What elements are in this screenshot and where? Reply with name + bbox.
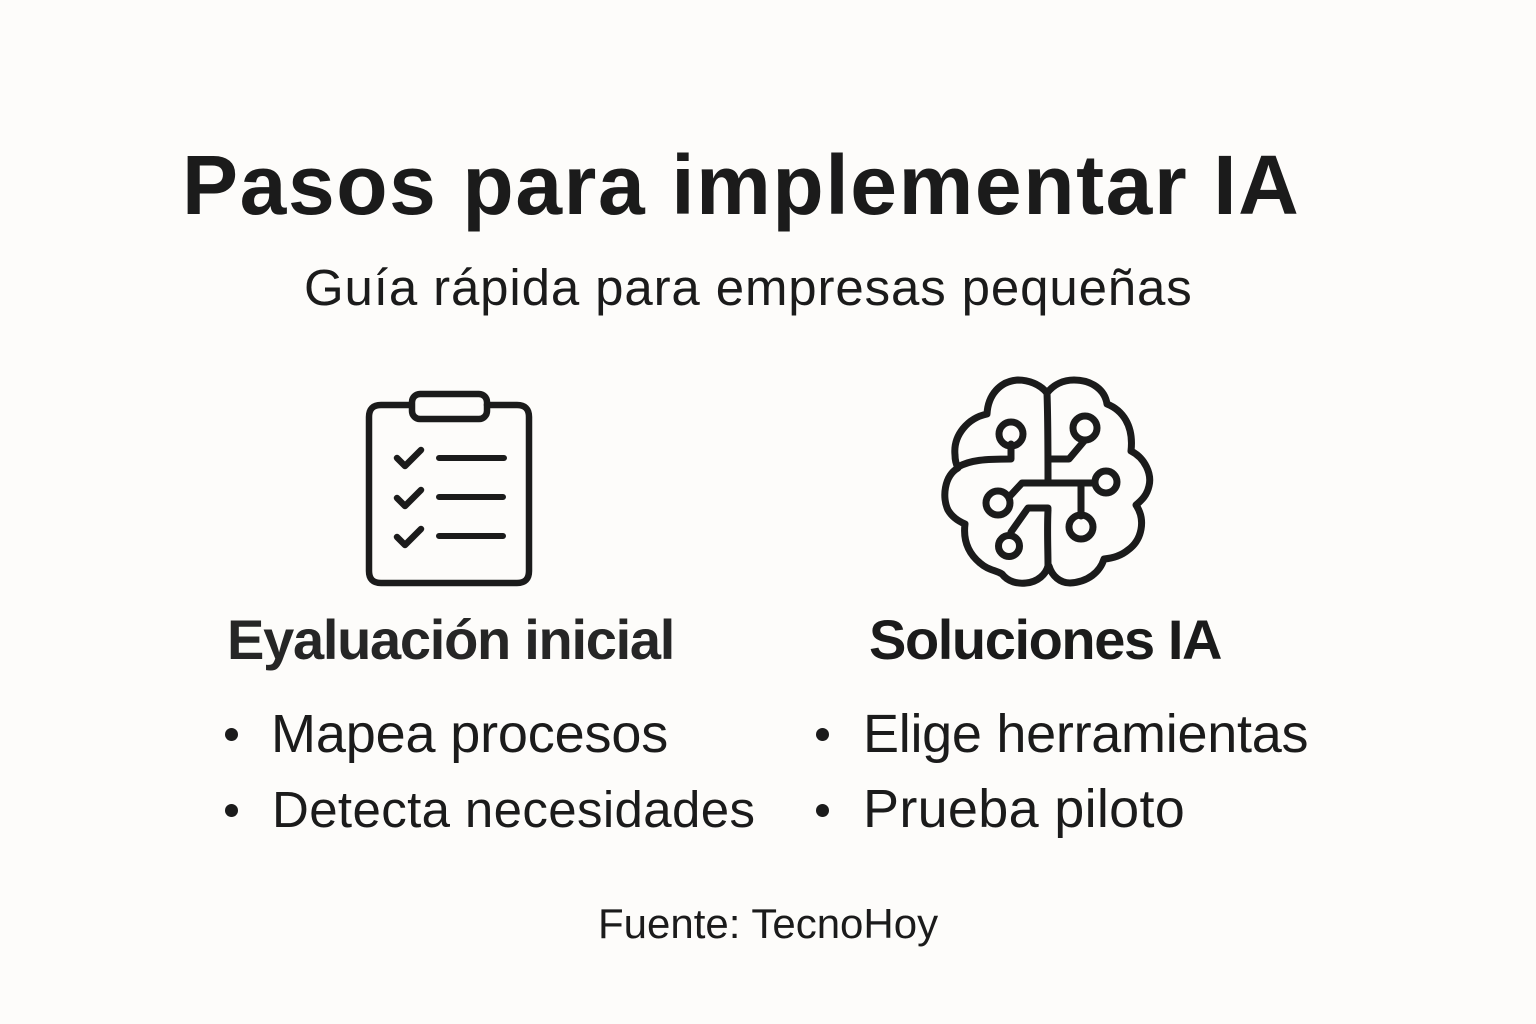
heading: soluciones IA: Soluciones IA (869, 608, 1221, 671)
panel: evaluación inicial (225, 390, 755, 838)
icon: brain with circuit (941, 376, 1154, 587)
title: Pasos para implementar IA (182, 138, 1300, 232)
bullet list (816, 704, 1308, 839)
bullet list (225, 704, 755, 838)
subtitle: Guía rápida para empresas pequeñas (304, 259, 1193, 316)
source: Fuente: TecnoHoy (598, 900, 938, 947)
icon: clipboard checklist (366, 390, 532, 586)
panel: soluciones IA (816, 376, 1308, 839)
bullet item: detecta necesidades: Detecta necesidades (272, 781, 755, 838)
bullet item: elige herramientas: Elige herramientas (863, 704, 1308, 764)
heading: evaluación inicial: Eyaluación inicial (227, 608, 674, 671)
bullet item: mapea procesos: Mapea procesos (271, 704, 668, 764)
bullet item: prueba piloto: Prueba piloto (863, 779, 1185, 839)
